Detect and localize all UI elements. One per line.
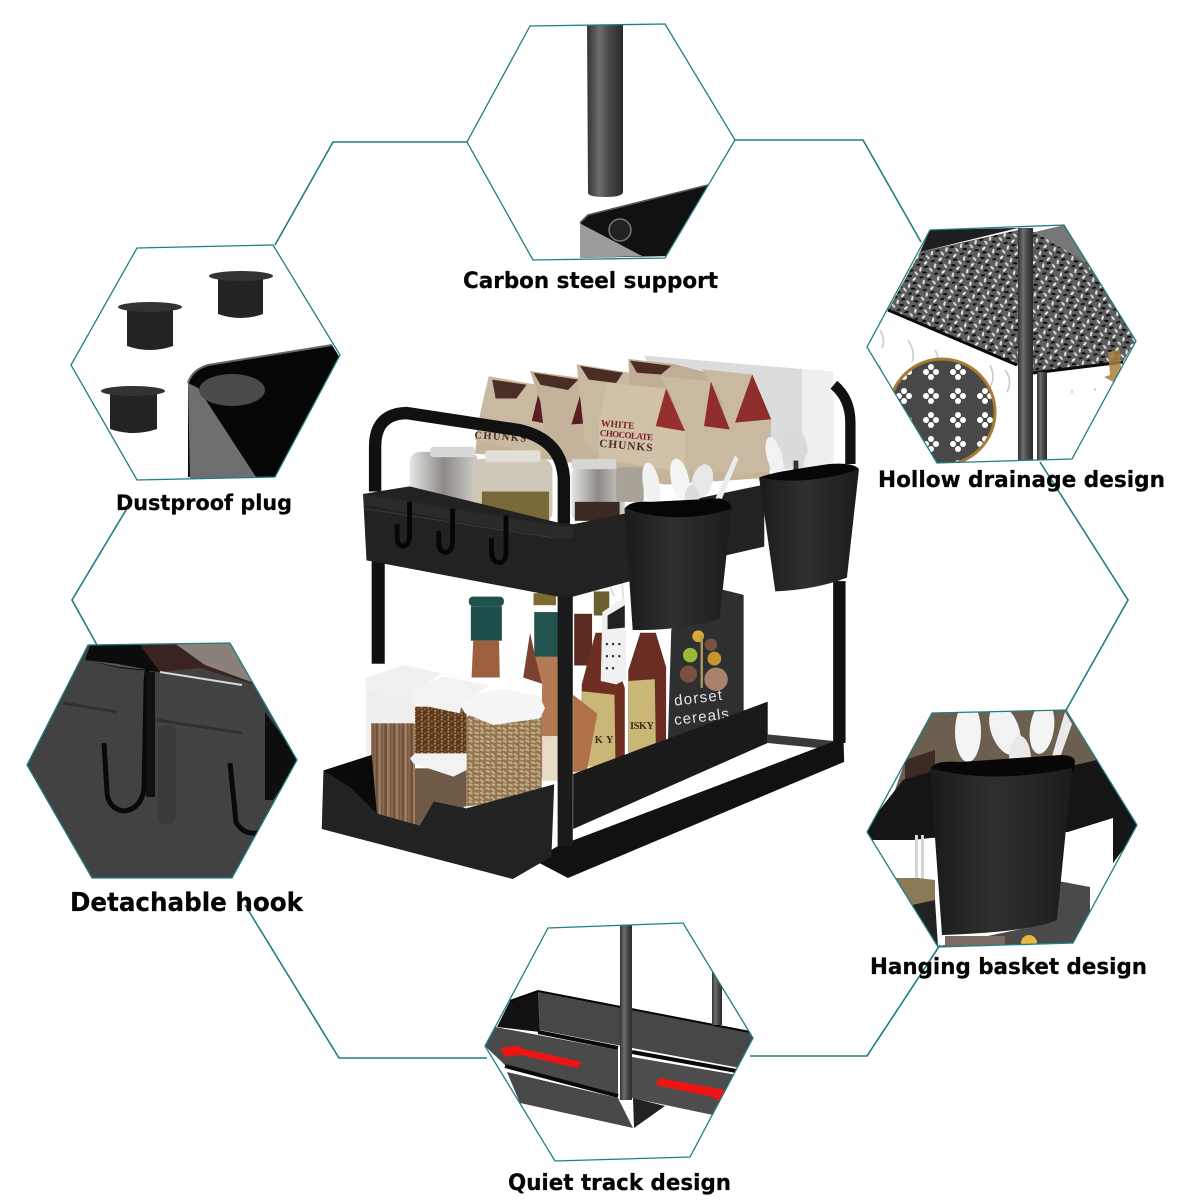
panel: carbon steel support [467,20,735,260]
drawer front right [632,1057,737,1115]
pasta container [460,688,545,822]
panel: hanging basket design [860,701,1142,951]
bottles [469,591,666,781]
food containers [365,665,545,838]
label: detachable hook: Detachable hook [70,888,304,918]
large background hexagon outline [72,140,1128,1058]
product: two tier organizer [322,355,859,879]
icon: tray corner [580,185,708,258]
cartons: CHUNKS [474,430,527,445]
right handle [834,385,850,464]
rails under rear [768,734,837,750]
seed container [410,677,490,753]
drawer interior [538,991,753,1068]
lower drawer back [573,702,768,829]
dark cereal box: dorset [673,687,724,710]
cutlery [955,712,981,762]
water droplets [880,330,1095,393]
cartons [474,359,771,485]
bottles: SKY [586,735,614,746]
icon: hook one [104,668,150,811]
base plate [534,738,844,878]
carton text: WHITE [600,418,635,432]
panel: hollow drainage design [867,225,1136,468]
inset circle with flower holes [889,359,995,465]
bottles: ISKY [630,721,655,732]
product rear and shelf contents [372,355,850,878]
cartons: CHOCOLATE [599,428,654,442]
icon: plug three [101,386,165,433]
drawer front left [485,1027,618,1097]
left handle [375,413,564,526]
product front structure [322,413,859,879]
hook one stem shadow [146,672,155,797]
rear post [833,581,846,743]
rear gray box [644,355,833,471]
label: quiet track design: Quiet track design [508,1171,731,1196]
left rear post [372,560,385,664]
rear basket with spoons [759,424,859,591]
icon: hanging basket [931,755,1075,776]
front post [558,526,573,846]
brown basket accent [1104,350,1121,382]
label: carbon steel support: Carbon steel support [463,269,718,294]
cereal box edge [935,880,1090,947]
icon: plug one [118,302,182,350]
icon: plug two [209,271,273,318]
label: hanging basket design: Hanging basket design [870,955,1147,980]
top shelf [363,485,764,597]
lower drawer front [322,755,554,879]
dark shelf band [860,757,1142,863]
posts [620,925,632,1100]
tall container [365,665,442,838]
hooks on shelf [397,502,506,562]
arrow: slide right [655,1078,725,1102]
label: dustproof plug: Dustproof plug [116,491,292,515]
jars [410,447,644,523]
lower container [410,752,467,827]
arrow: slide left [500,1045,582,1068]
panel: detachable hook [20,640,305,885]
cartons: CHUNKS [599,438,653,454]
panel: dustproof plug [71,245,340,480]
dark cereal box [668,590,744,743]
grater [601,560,627,684]
panel: quiet track design [485,923,753,1161]
label: hollow drainage design: Hollow drainage design [878,468,1165,493]
icon: hook two [230,763,258,833]
front basket with cutlery [624,455,738,630]
icon: steel pole [587,20,623,197]
perforated shelf [888,230,1136,373]
dark cereal box: cereals [673,705,730,729]
posts [1018,228,1033,468]
icon: tray corner with plug [188,345,340,477]
